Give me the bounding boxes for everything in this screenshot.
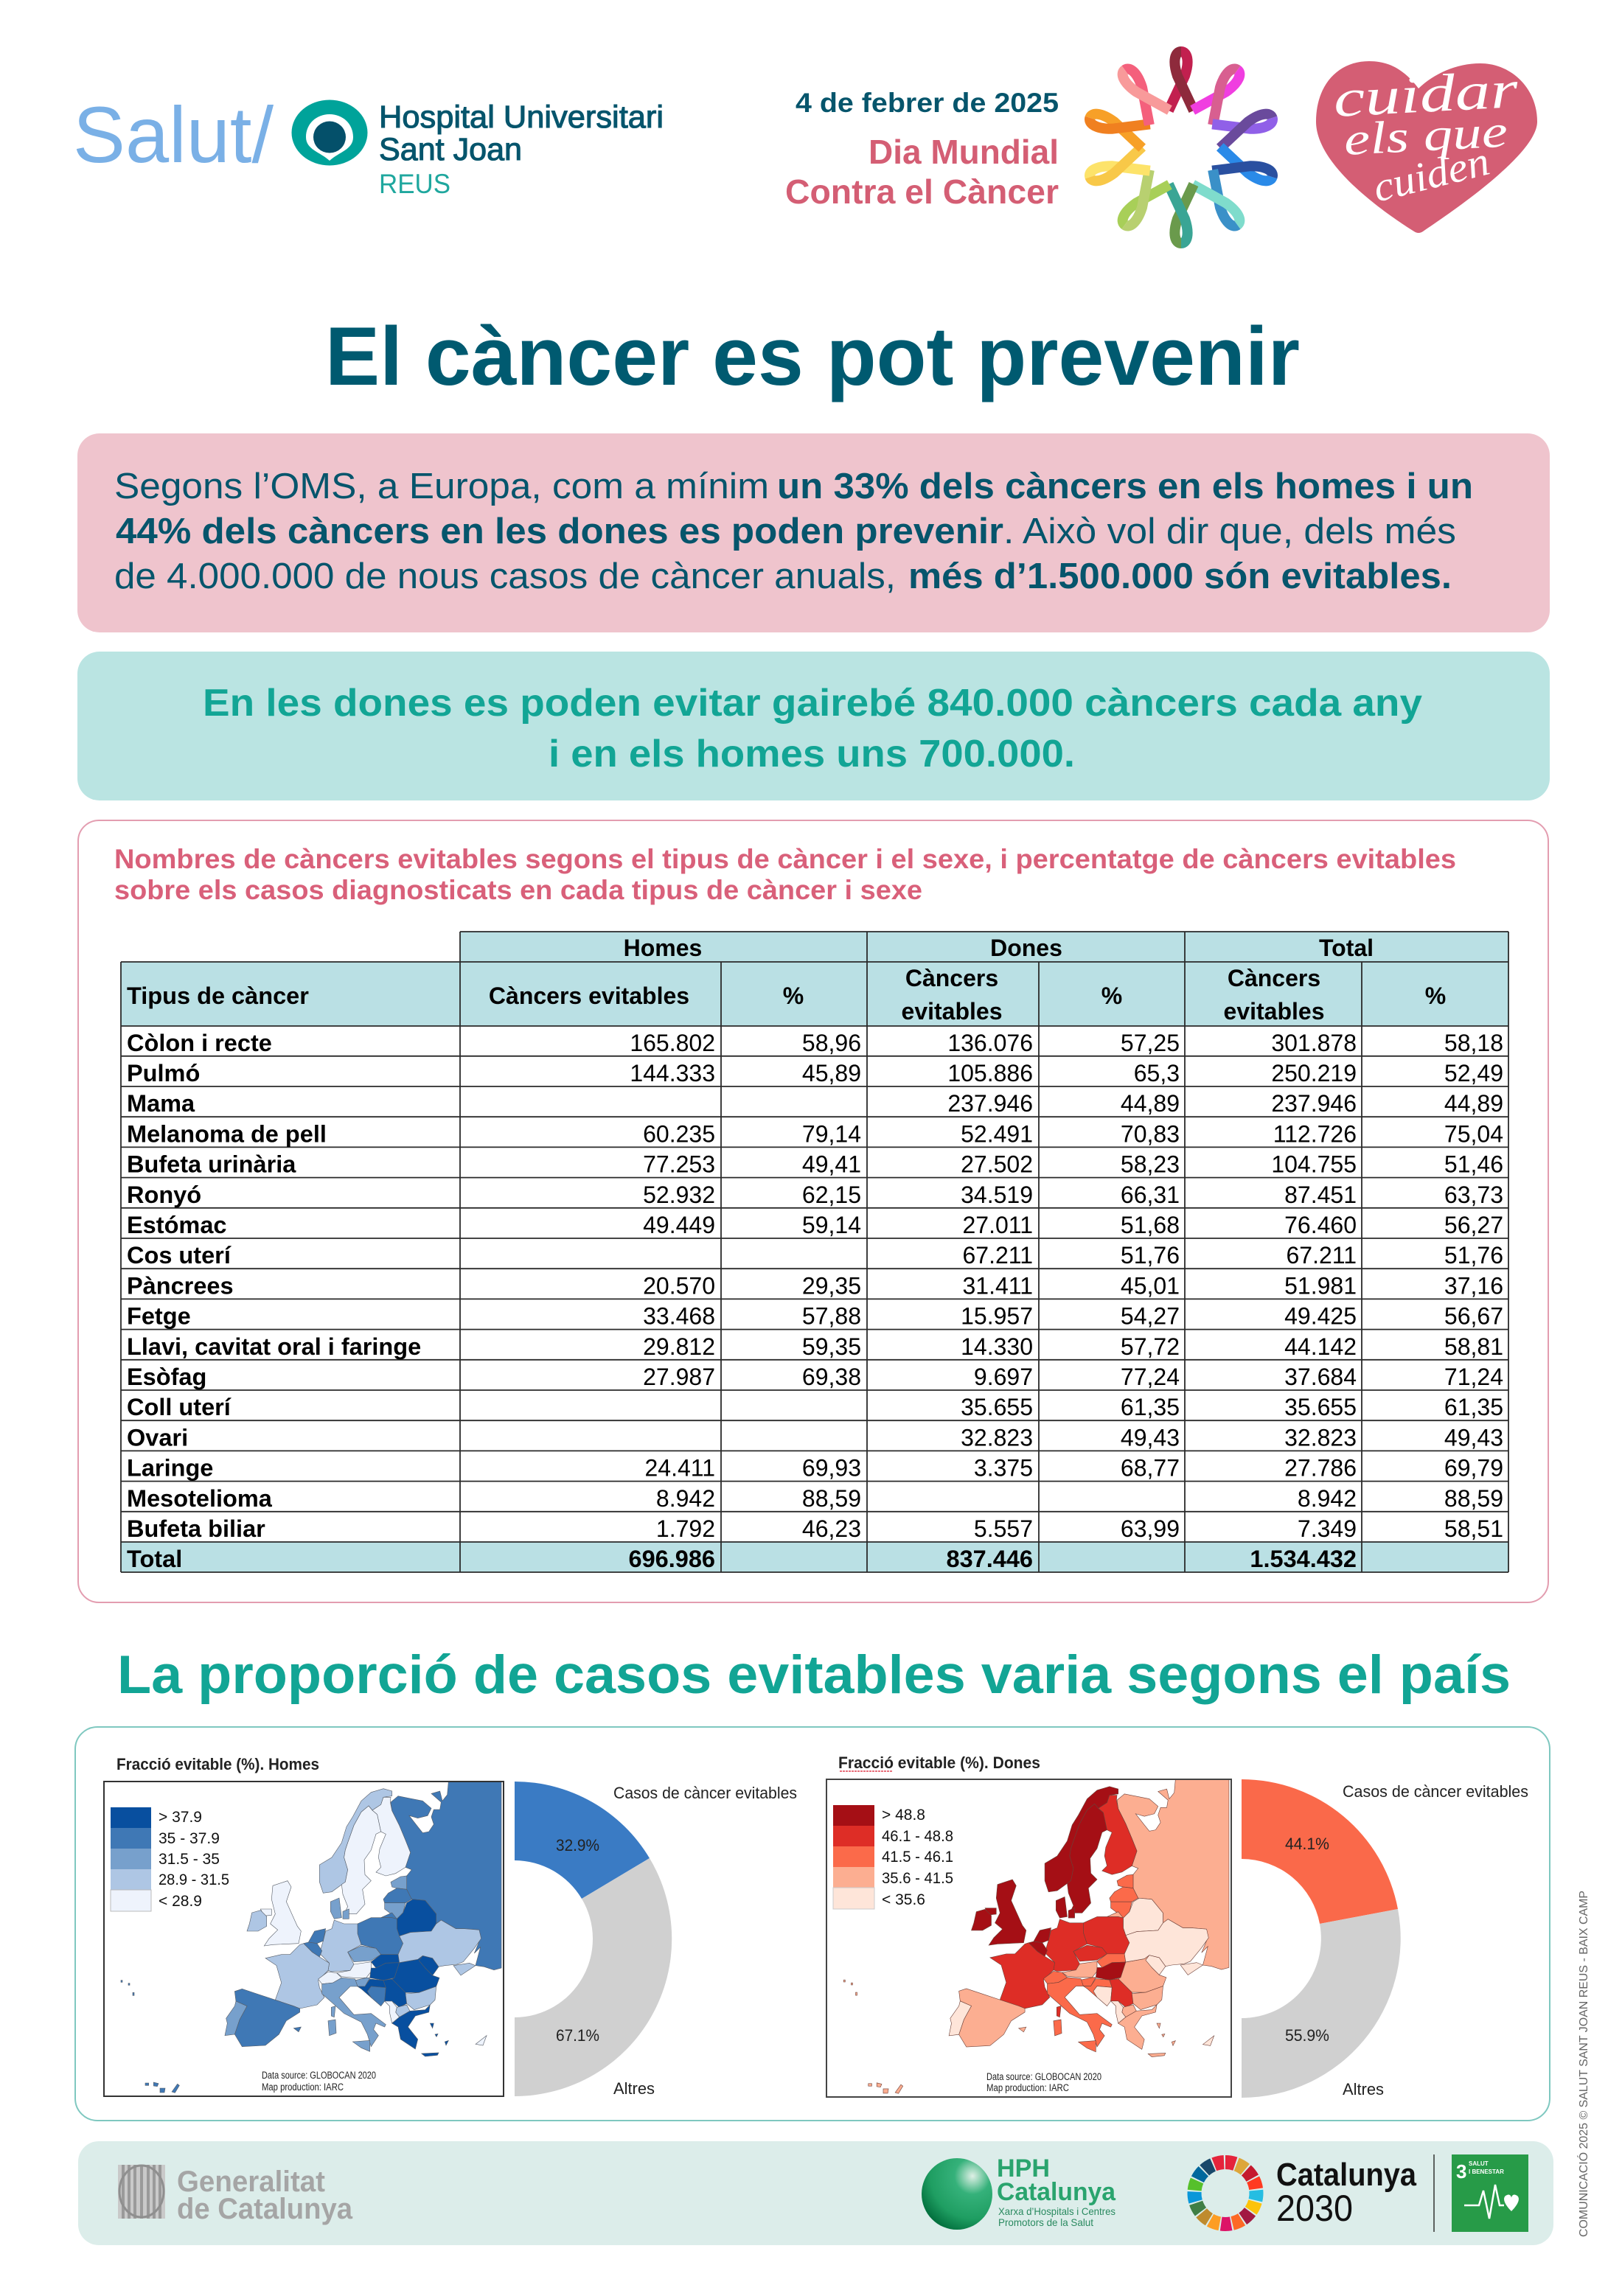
table heading: sobre els casos diagnosticats en cada tipus de càncer i sexe — [114, 875, 922, 905]
date and world cancer day: Dia Mundial — [869, 133, 1059, 171]
map source: men: Map production: IARC — [262, 2082, 344, 2093]
map heading: men: Fracció evitable (%). Homes — [116, 1755, 319, 1773]
table rows: Total — [127, 1546, 182, 1572]
table rows: 1.534.432 — [1250, 1546, 1357, 1572]
logo: Generalitat de Catalunya — [118, 2165, 353, 2225]
panel: WHO statement: més d’1.500.000 són evitables. — [908, 556, 1452, 596]
panel: WHO statement: 44% dels càncers en les dones es poden prevenir — [116, 512, 1003, 551]
table rows: 37.684 — [1284, 1364, 1357, 1390]
table rows: 58,23 — [1121, 1151, 1180, 1178]
panel: WHO statement — [77, 433, 1550, 632]
logo: Hospital Universitari Sant Joan Reus: Hospital Universitari — [379, 100, 664, 135]
table rows: 56,27 — [1444, 1212, 1503, 1238]
table rows: 88,59 — [802, 1485, 861, 1512]
table header — [127, 935, 1446, 1025]
chart: women half donut: Altres — [1343, 2080, 1384, 2098]
table rows: 65,3 — [1134, 1060, 1180, 1086]
icon: heart "Cuidar els que cuiden": cuiden — [1368, 139, 1494, 212]
panel: table of avoidable cancers — [78, 820, 1548, 1602]
table rows: 51,76 — [1121, 1242, 1180, 1269]
chart: women half donut: 44.1% — [1285, 1835, 1329, 1853]
logo: Catalunya 2030: Catalunya — [1276, 2157, 1416, 2193]
table rows: 71,24 — [1444, 1364, 1503, 1390]
table rows: 696.986 — [629, 1546, 715, 1572]
table heading — [114, 844, 1456, 905]
table rows: 35.655 — [961, 1394, 1033, 1420]
table rows: 67.211 — [963, 1242, 1033, 1269]
table rows: 250.219 — [1271, 1060, 1357, 1086]
table rows: 49,41 — [802, 1151, 861, 1178]
table rows: 34.519 — [961, 1182, 1033, 1208]
table rows: 56,67 — [1444, 1303, 1503, 1330]
table rows: 57,25 — [1121, 1030, 1180, 1056]
table rows: 57,72 — [1121, 1333, 1180, 1360]
table rows: 67.211 — [1286, 1242, 1357, 1269]
map legend: women: 46.1 - 48.8 — [882, 1828, 953, 1845]
table rows: 46,23 — [802, 1515, 861, 1542]
table rows: 29,35 — [802, 1272, 861, 1299]
icon: heart "Cuidar els que cuiden": els que — [1343, 106, 1508, 165]
map source: men: Data source: GLOBOCAN 2020 — [262, 2070, 376, 2081]
table rows: 301.878 — [1271, 1030, 1357, 1056]
table rows: 136.076 — [947, 1030, 1033, 1056]
table rows: 837.446 — [947, 1546, 1033, 1572]
data table — [121, 932, 1508, 1572]
table header: Tipus de càncer — [127, 983, 309, 1009]
table rows: Llavi, cavitat oral i faringe — [127, 1333, 421, 1360]
table rows: 144.333 — [630, 1060, 715, 1086]
table rows: 7.349 — [1298, 1515, 1357, 1542]
table rows: 87.451 — [1284, 1182, 1357, 1208]
table rows: 44,89 — [1444, 1090, 1503, 1117]
icon: hospital drop — [292, 100, 367, 165]
panel: footer logos — [78, 2141, 1553, 2245]
chart: men half donut: Altres — [613, 2079, 655, 2098]
table rows: 58,18 — [1444, 1030, 1503, 1056]
panel: avoidable cancers callout — [77, 652, 1550, 800]
map: women — [826, 1779, 1231, 2097]
panel: avoidable cancers callout: i en els homes uns 700.000. — [549, 733, 1075, 775]
table rows: Cos uterí — [127, 1242, 232, 1269]
table header: Total — [1319, 935, 1374, 961]
table rows: 69,38 — [802, 1364, 861, 1390]
table rows: 51.981 — [1284, 1272, 1357, 1299]
table rows: 68,77 — [1121, 1455, 1180, 1482]
table rows: 61,35 — [1121, 1394, 1180, 1420]
map legend: men: 28.9 - 31.5 — [159, 1871, 229, 1888]
icon: ring of coloured ribbons — [1086, 52, 1276, 243]
table rows: 33.468 — [643, 1303, 715, 1330]
date and world cancer day — [785, 88, 1059, 211]
logo: HPH Catalunya — [922, 2154, 1116, 2230]
logo: Catalunya 2030: 2030 — [1276, 2188, 1353, 2229]
table rows: 1.792 — [656, 1515, 715, 1542]
table rows: 69,79 — [1444, 1455, 1503, 1482]
table rows: Còlon i recte — [127, 1030, 272, 1056]
table rows: 58,51 — [1444, 1515, 1503, 1542]
icon: SDG 3 health and wellbeing — [1452, 2154, 1528, 2232]
map legend: men: < 28.9 — [159, 1893, 202, 1910]
table rows: 66,31 — [1121, 1182, 1180, 1208]
table rows: 20.570 — [643, 1272, 715, 1299]
table rows: Pàncrees — [127, 1272, 234, 1299]
map heading: women: Fracció evitable (%). Dones — [838, 1754, 1040, 1772]
date and world cancer day: 4 de febrer de 2025 — [796, 88, 1059, 118]
table rows: 44.142 — [1284, 1333, 1357, 1360]
chart: men half donut: 67.1% — [556, 2026, 599, 2045]
table rows: Mesotelioma — [127, 1485, 273, 1512]
chart: men half donut: Casos de càncer evitables — [613, 1784, 797, 1802]
table rows: 69,93 — [802, 1455, 861, 1482]
table rows: 51,76 — [1444, 1242, 1503, 1269]
table rows: 49,43 — [1444, 1424, 1503, 1451]
icon: SDG 3 health and wellbeing: 3 — [1456, 2160, 1466, 2182]
logo: Generalitat de Catalunya: de Catalunya — [177, 2193, 353, 2225]
logo: Catalunya 2030 — [1182, 2149, 1416, 2237]
table rows: 49.425 — [1284, 1303, 1357, 1330]
table rows: 49,43 — [1121, 1424, 1180, 1451]
table rows: 9.697 — [974, 1364, 1033, 1390]
table rows: 62,15 — [802, 1182, 861, 1208]
table rows: 57,88 — [802, 1303, 861, 1330]
map source: men — [262, 2070, 376, 2093]
chart: women half donut: 55.9% — [1285, 2026, 1329, 2045]
logo: Hospital Universitari Sant Joan Reus: REUS — [379, 169, 450, 199]
map source: women: Map production: IARC — [986, 2082, 1069, 2093]
panel: WHO statement: Segons l’OMS, a Europa, com a mínim — [114, 467, 769, 506]
table header: Càncers evitables — [489, 983, 689, 1009]
table rows: 54,27 — [1121, 1303, 1180, 1330]
table rows: 59,35 — [802, 1333, 861, 1360]
date and world cancer day: Contra el Càncer — [785, 172, 1059, 211]
icon: heart "Cuidar els que cuiden": cuidar — [1332, 60, 1520, 128]
panel: WHO statement: un 33% dels càncers en els homes i un — [777, 467, 1473, 506]
table header: Càncers — [905, 965, 998, 991]
table header: Homes — [624, 935, 702, 961]
table rows: 51,46 — [1444, 1151, 1503, 1178]
table rows: 14.330 — [961, 1333, 1033, 1360]
table rows: Bufeta biliar — [127, 1515, 265, 1542]
table rows: 237.946 — [947, 1090, 1033, 1117]
logo: Generalitat de Catalunya: Generalitat — [177, 2166, 325, 2198]
table rows: 52.491 — [961, 1120, 1033, 1147]
table rows: 27.502 — [961, 1151, 1033, 1178]
table header: % — [783, 983, 804, 1009]
map legend: women — [833, 1805, 953, 1909]
panel: maps and charts — [75, 1727, 1550, 2121]
table rows: 8.942 — [1298, 1485, 1357, 1512]
table rows: 8.942 — [656, 1485, 715, 1512]
icon: SDG wheel — [1182, 2149, 1269, 2237]
logo: HPH Catalunya: Promotors de la Salut — [998, 2216, 1093, 2228]
map source: women — [986, 2071, 1101, 2093]
panel: WHO statement: de 4.000.000 de nous casos de càncer anuals, — [114, 556, 896, 596]
icon: heart "Cuidar els que cuiden" — [1316, 60, 1537, 233]
map legend: women: < 35.6 — [882, 1891, 925, 1908]
table rows: 237.946 — [1271, 1090, 1357, 1117]
icon: SDG 3 health and wellbeing: I BENESTAR — [1469, 2168, 1504, 2175]
table rows: 58,81 — [1444, 1333, 1503, 1360]
panel: WHO statement: . Això vol dir que, dels més — [1003, 512, 1456, 551]
table header: % — [1101, 983, 1122, 1009]
table rows: 70,83 — [1121, 1120, 1180, 1147]
table rows: 29.812 — [643, 1333, 715, 1360]
table rows: 31.411 — [963, 1272, 1033, 1299]
table rows: 76.460 — [1284, 1212, 1357, 1238]
table rows: 27.011 — [963, 1212, 1033, 1238]
logo: HPH Catalunya: HPH — [997, 2154, 1050, 2182]
chart: women half donut: Casos de càncer evitables — [1343, 1782, 1528, 1801]
table rows: 105.886 — [947, 1060, 1033, 1086]
table rows: 44,89 — [1121, 1090, 1180, 1117]
table rows: 5.557 — [974, 1515, 1033, 1542]
table rows: 52,49 — [1444, 1060, 1503, 1086]
table rows: 3.375 — [974, 1455, 1033, 1482]
table rows: 61,35 — [1444, 1394, 1503, 1420]
map legend: women: 41.5 - 46.1 — [882, 1849, 953, 1866]
table header: Càncers — [1228, 965, 1320, 991]
heading: proportion by country: La proporció de casos evitables varia segons el país — [117, 1645, 1511, 1705]
logo: Hospital Universitari Sant Joan Reus: Sant Joan — [379, 132, 522, 167]
chart: women half donut — [1242, 1779, 1528, 2098]
table rows: Estómac — [127, 1212, 226, 1238]
table rows: 77.253 — [643, 1151, 715, 1178]
table rows: 63,73 — [1444, 1182, 1503, 1208]
map legend: men: > 37.9 — [159, 1809, 202, 1826]
icon: SDG 3 health and wellbeing: SALUT — [1469, 2160, 1489, 2167]
table rows: 24.411 — [644, 1455, 715, 1482]
table rows: 49.449 — [643, 1212, 715, 1238]
table rows: 79,14 — [802, 1120, 861, 1147]
table rows: 58,96 — [802, 1030, 861, 1056]
table rows: 35.655 — [1284, 1394, 1357, 1420]
table rows: 52.932 — [643, 1182, 715, 1208]
table rows: 32.823 — [1284, 1424, 1357, 1451]
table header: evitables — [1224, 998, 1324, 1025]
table rows: 27.987 — [643, 1364, 715, 1390]
credit: vertical text: COMUNICACIÓ 2025 © SALUT SANT JOAN REUS - BAIX CAMP — [1576, 1891, 1590, 2237]
map legend: women: 35.6 - 41.5 — [882, 1870, 953, 1887]
table rows: 112.726 — [1273, 1120, 1357, 1147]
table rows: 75,04 — [1444, 1120, 1503, 1147]
table rows — [127, 1030, 1503, 1572]
logo: HPH Catalunya: Catalunya — [997, 2178, 1116, 2206]
table header: evitables — [902, 998, 1002, 1025]
logo: Salut: Salut/ — [73, 90, 274, 179]
table rows: Ronyó — [127, 1182, 201, 1208]
table rows: 37,16 — [1444, 1272, 1503, 1299]
table heading: Nombres de càncers evitables segons el tipus de càncer i el sexe, i percentatge de càncers evitables — [114, 844, 1456, 874]
table rows: Esòfag — [127, 1364, 206, 1390]
table rows: 51,68 — [1121, 1212, 1180, 1238]
title: El càncer es pot prevenir — [325, 310, 1300, 402]
table rows: 15.957 — [961, 1303, 1033, 1330]
map legend: men: 31.5 - 35 — [159, 1851, 220, 1868]
table rows: 63,99 — [1121, 1515, 1180, 1542]
chart: men half donut — [515, 1782, 797, 2098]
chart: men half donut: 32.9% — [556, 1836, 599, 1854]
table rows: Mama — [127, 1090, 195, 1117]
table rows: 60.235 — [643, 1120, 715, 1147]
panel: avoidable cancers callout: En les dones es poden evitar gairebé 840.000 càncers cada any — [203, 682, 1422, 725]
table header: % — [1425, 983, 1446, 1009]
table rows: 59,14 — [802, 1212, 861, 1238]
map legend: men: 35 - 37.9 — [159, 1830, 220, 1847]
table rows: Laringe — [127, 1455, 213, 1482]
table rows: Ovari — [127, 1424, 188, 1451]
table rows: Coll uterí — [127, 1394, 232, 1420]
table rows: 32.823 — [961, 1424, 1033, 1451]
icon: Generalitat shield — [118, 2165, 165, 2219]
table rows: 45,89 — [802, 1060, 861, 1086]
table rows: Fetge — [127, 1303, 191, 1330]
map legend: men — [111, 1807, 229, 1911]
table rows: 27.786 — [1284, 1455, 1357, 1482]
map: men — [104, 1782, 504, 2096]
table rows: 88,59 — [1444, 1485, 1503, 1512]
map legend: women: > 48.8 — [882, 1807, 925, 1824]
table rows: 77,24 — [1121, 1364, 1180, 1390]
table rows: 45,01 — [1121, 1272, 1180, 1299]
table rows: Melanoma de pell — [127, 1120, 327, 1147]
logo: Hospital Universitari Sant Joan Reus — [292, 100, 664, 199]
logo: HPH Catalunya: Xarxa d’Hospitals i Centres — [998, 2205, 1115, 2217]
table rows: Pulmó — [127, 1060, 200, 1086]
table rows: 165.802 — [630, 1030, 715, 1056]
table rows: 104.755 — [1271, 1151, 1357, 1178]
table rows: Bufeta urinària — [127, 1151, 296, 1178]
map source: women: Data source: GLOBOCAN 2020 — [986, 2071, 1101, 2082]
table header: Dones — [990, 935, 1062, 961]
